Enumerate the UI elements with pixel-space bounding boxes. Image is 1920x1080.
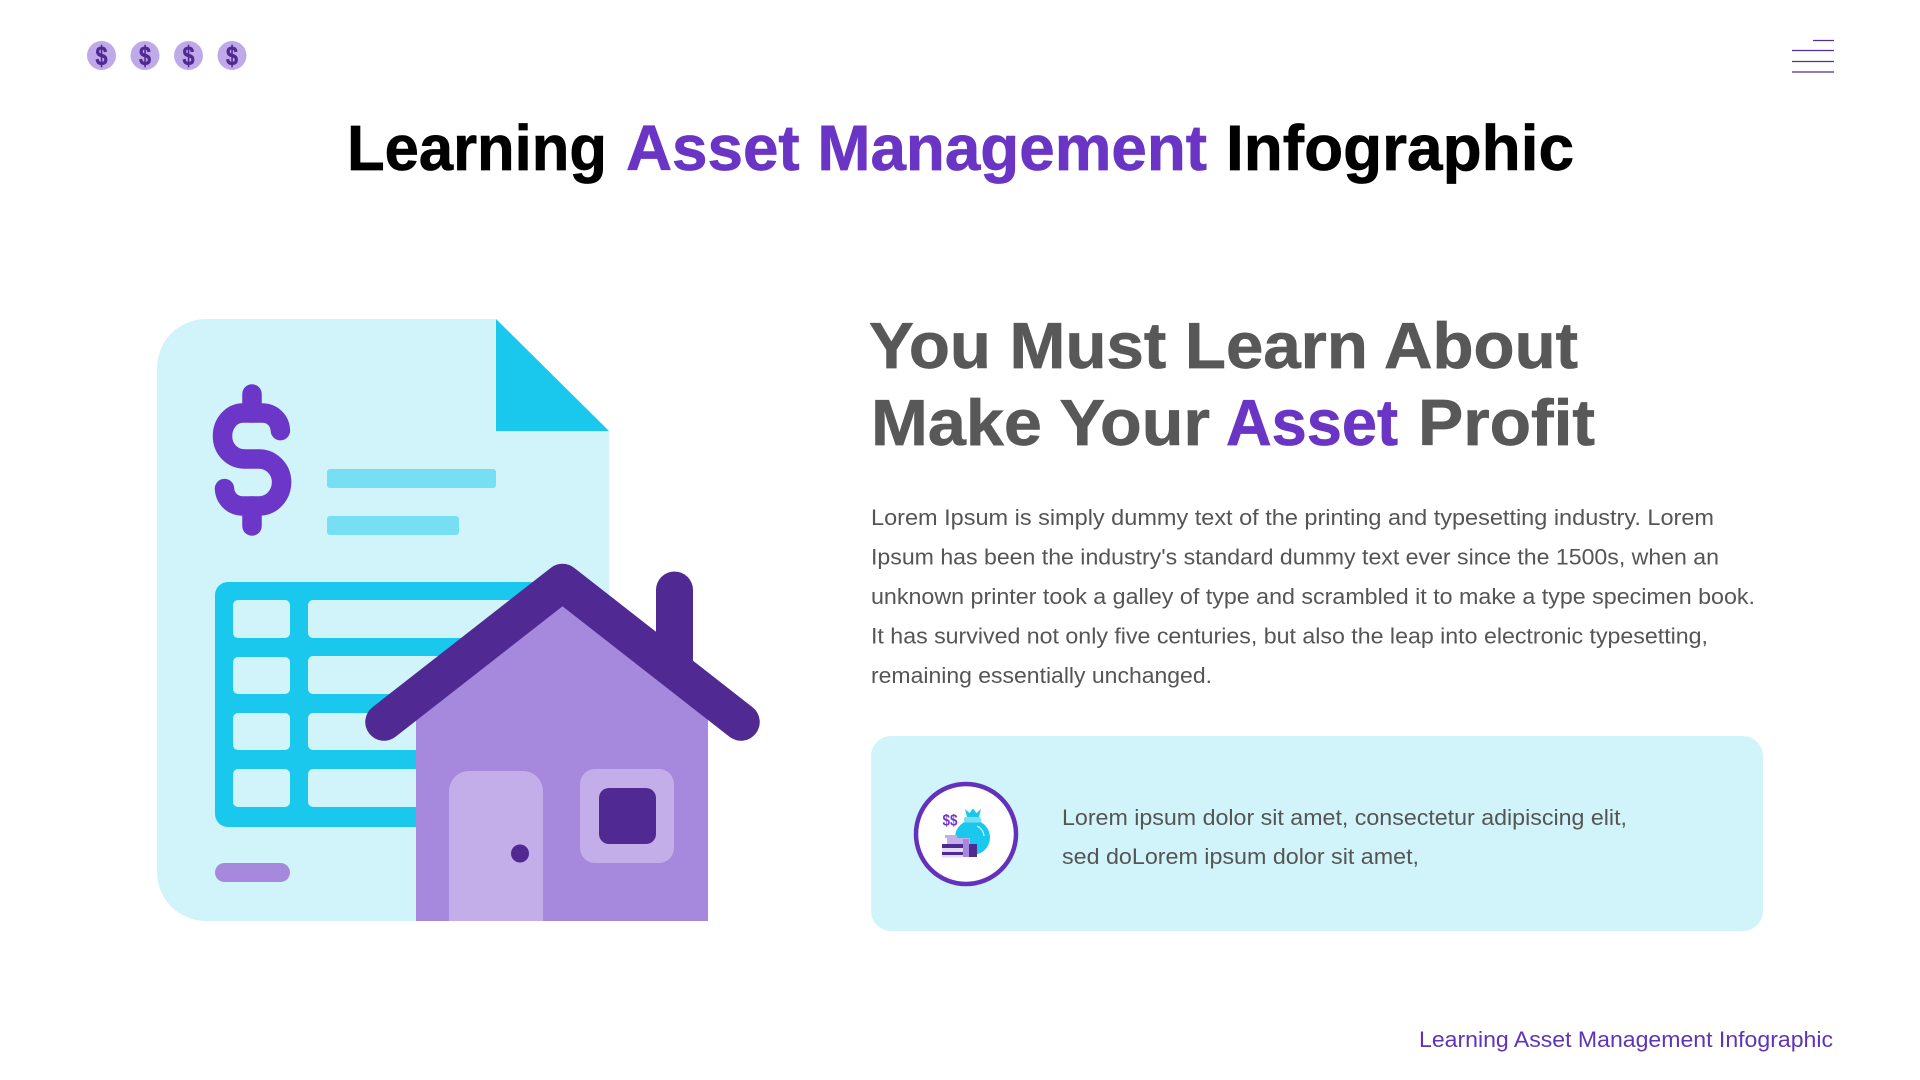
document text bars bbox=[327, 469, 496, 535]
body paragraph: remaining essentially unchanged. bbox=[871, 663, 1212, 688]
footer text: Learning Asset Management Infographic bbox=[1419, 1027, 1833, 1052]
dollar coin row: $ bbox=[226, 41, 238, 71]
menu lines icon bbox=[1792, 40, 1834, 72]
icon: money bag badge: $$ bbox=[942, 812, 958, 830]
document corner fold bbox=[496, 319, 609, 431]
heading: Make Your bbox=[871, 386, 1210, 459]
body paragraph: Ipsum has been the industry's standard dummy text ever since the 1500s, when an bbox=[871, 544, 1719, 570]
dollar coin row bbox=[87, 41, 246, 71]
table bbox=[215, 582, 555, 827]
title: Learning bbox=[347, 112, 607, 184]
body paragraph: It has survived not only five centuries, but also the leap into electronic typesetting, bbox=[871, 624, 1708, 648]
callout text: Lorem ipsum dolor sit amet, consectetur adipiscing elit, bbox=[1062, 805, 1627, 830]
callout text bbox=[1062, 805, 1627, 869]
body paragraph: Lorem Ipsum is simply dummy text of the printing and typesetting industry. Lorem bbox=[871, 505, 1714, 530]
dollar sign bbox=[222, 394, 282, 526]
body paragraph: unknown printer took a galley of type and scrambled it to make a type specimen book. bbox=[871, 584, 1755, 609]
dollar coin row: $ bbox=[182, 41, 194, 71]
title: Asset Management bbox=[626, 112, 1207, 184]
document sheet bbox=[157, 319, 609, 921]
heading bbox=[869, 309, 1595, 459]
callout panel bbox=[871, 736, 1763, 931]
title: Infographic bbox=[1226, 112, 1574, 184]
title bbox=[347, 112, 1574, 184]
callout text: sed doLorem ipsum dolor sit amet, bbox=[1062, 844, 1419, 869]
heading: Asset bbox=[1226, 386, 1398, 459]
illustration: document and house bbox=[157, 319, 741, 921]
window bbox=[580, 769, 674, 863]
purple pill bbox=[215, 863, 290, 882]
dollar coin row: $ bbox=[139, 41, 151, 71]
house bbox=[384, 582, 741, 921]
heading: You Must Learn About bbox=[869, 309, 1578, 382]
door bbox=[449, 771, 543, 921]
body paragraph bbox=[871, 505, 1755, 688]
dollar coin row: $ bbox=[96, 41, 108, 71]
icon: money bag badge bbox=[916, 784, 1016, 884]
heading: Profit bbox=[1418, 386, 1595, 459]
